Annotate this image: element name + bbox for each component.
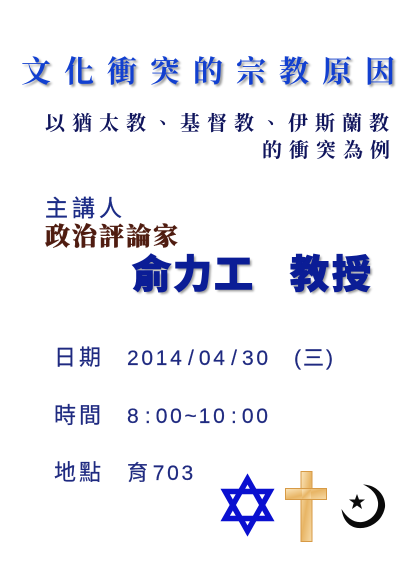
date row: 日期 (54, 345, 104, 370)
subtitle line 2: 的衝突為例 (262, 140, 397, 162)
icon: cross (286, 472, 326, 542)
date row: 2014/04/30 (127, 347, 271, 370)
time row: 時間 (54, 403, 104, 428)
speaker name: 教授 (290, 254, 374, 297)
date row: (三) (294, 347, 335, 370)
time row (54, 403, 271, 428)
speaker name (132, 253, 374, 297)
icon: star and crescent (342, 484, 385, 528)
icon: star of David (225, 479, 270, 531)
title: 文化衝突的宗教原因 (21, 56, 408, 89)
speaker title: 政治評論家 (45, 224, 180, 251)
location row: 地點 (54, 460, 104, 485)
date row (54, 345, 335, 370)
location row (54, 460, 196, 485)
speaker label: 主講人 (45, 195, 126, 221)
speaker name: 俞力工 (132, 254, 255, 297)
subtitle line 1: 以猶太教、基督教、伊斯蘭教 (45, 113, 396, 135)
religious symbols (220, 471, 386, 542)
time row: 8:00~10:00 (127, 405, 271, 428)
location row: 育703 (127, 462, 196, 485)
